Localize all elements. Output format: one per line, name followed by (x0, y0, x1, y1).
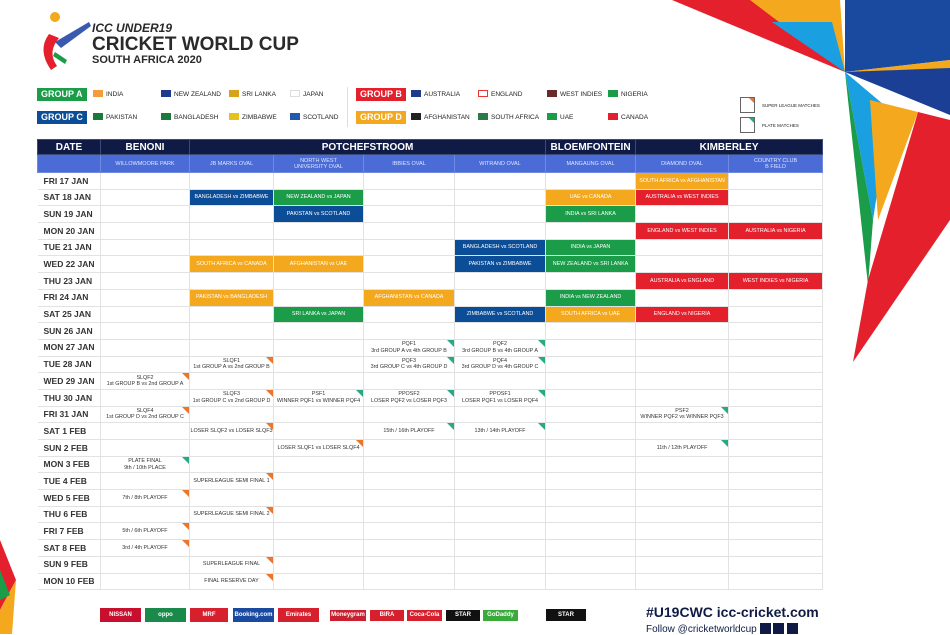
legend: groups: ZIMBABWE (242, 114, 277, 121)
schedule table: SAT 25 JAN (44, 309, 91, 319)
schedule table: UNIVERSITY OVAL (294, 164, 343, 170)
sponsors strip: oppo (158, 612, 173, 618)
schedule table: MON 10 FEB (44, 576, 95, 586)
legend: groups: JAPAN (303, 91, 323, 98)
schedule table: PAKISTAN vs SCOTLAND (287, 211, 350, 217)
schedule table: IBBIES OVAL (392, 160, 426, 166)
schedule table: PPOSF1 (489, 391, 511, 397)
schedule table: WED 22 JAN (44, 259, 95, 269)
schedule table: SLQF1 (223, 358, 240, 364)
sponsors strip: BIRA (380, 612, 394, 618)
schedule table: FRI 24 JAN (44, 292, 88, 302)
legend: groups: SCOTLAND (303, 114, 338, 121)
legend: groups (37, 87, 648, 127)
schedule table (37, 139, 823, 590)
legend: groups: BANGLADESH (174, 114, 218, 121)
footer: hashtag and website (646, 604, 819, 635)
legend: groups: GROUP B (360, 89, 402, 99)
schedule table: SOUTH AFRICA vs UAE (561, 311, 620, 317)
legend: match types (740, 97, 820, 133)
schedule table: PQF1 (402, 341, 416, 347)
schedule table: SOUTH AFRICA vs AFGHANISTAN (639, 178, 725, 184)
schedule table: TUE 4 FEB (44, 476, 87, 486)
schedule table: MANGAUNG OVAL (566, 160, 615, 166)
schedule table: PSF2 (675, 408, 689, 414)
sponsors strip: STAR (455, 612, 471, 618)
schedule table: INDIA vs SRI LANKA (565, 211, 616, 217)
title text: SOUTH AFRICA 2020 (92, 54, 202, 66)
schedule table: 15th / 16th PLAYOFF (383, 428, 435, 434)
schedule table: THU 6 FEB (44, 509, 87, 519)
legend: groups: SRI LANKA (242, 91, 276, 98)
legend: groups: GROUP D (360, 112, 402, 122)
schedule table: ZIMBABWE vs SCOTLAND (467, 311, 533, 317)
schedule table: FRI 7 FEB (44, 526, 84, 536)
schedule table: INDIA vs NEW ZEALAND (560, 294, 621, 300)
schedule table: ENGLAND vs WEST INDIES (647, 228, 717, 234)
schedule table: WED 5 FEB (44, 493, 90, 503)
legend: groups: INDIA (106, 91, 123, 98)
schedule table: SAT 1 FEB (44, 426, 86, 436)
schedule table: LOSER PQF2 vs LOSER PQF3 (371, 398, 447, 404)
schedule table: SUN 26 JAN (44, 326, 93, 336)
title text: CRICKET WORLD CUP (92, 34, 299, 55)
schedule table: TUE 21 JAN (44, 242, 92, 252)
schedule table: DIAMOND OVAL (661, 160, 703, 166)
schedule table: BANGLADESH vs SCOTLAND (463, 244, 537, 250)
schedule table: COUNTRY CLUB (754, 158, 797, 164)
legend: groups: CANADA (621, 114, 648, 121)
sponsors strip: Moneygram (331, 612, 365, 618)
schedule table: AUSTRALIA vs NIGERIA (745, 228, 806, 234)
schedule table: SOUTH AFRICA vs CANADA (196, 261, 267, 267)
schedule table: AFGHANISTAN vs CANADA (375, 294, 443, 300)
decoration: top right colour fan (672, 0, 950, 362)
legend: match types: PLATE MATCHES (762, 123, 799, 128)
schedule table: NEW ZEALAND vs SRI LANKA (553, 261, 628, 267)
schedule table: B FIELD (765, 164, 786, 170)
schedule table: 1st GROUP C vs 2nd GROUP D (193, 398, 270, 404)
sponsors strip (100, 608, 586, 622)
schedule table: AUSTRALIA vs WEST INDIES (646, 194, 719, 200)
schedule table: 5th / 6th PLAYOFF (122, 528, 168, 534)
schedule table: 9th / 10th PLACE (124, 465, 166, 471)
legend: groups: GROUP A (41, 89, 83, 99)
schedule table: SUPERLEAGUE FINAL (203, 561, 260, 567)
title text: ICC UNDER19 (92, 21, 172, 35)
schedule table: UAE vs CANADA (570, 194, 612, 200)
sponsors strip: NISSAN (109, 612, 132, 618)
schedule table: 3rd GROUP C vs 4th GROUP D (371, 364, 447, 370)
legend: groups: NEW ZEALAND (174, 91, 221, 98)
sponsors strip: STAR (558, 612, 574, 618)
schedule table: BANGLADESH vs ZIMBABWE (194, 194, 268, 200)
legend: groups: UAE (560, 114, 573, 121)
schedule table: MON 3 FEB (44, 459, 90, 469)
schedule table: FRI 17 JAN (44, 176, 88, 186)
schedule table: PSF1 (312, 391, 325, 397)
sponsors strip: GoDaddy (487, 612, 514, 618)
schedule table: BENONI (126, 142, 164, 152)
schedule table: WILLOWMOORE PARK (115, 160, 175, 166)
schedule table: PAKISTAN vs BANGLADESH (196, 294, 267, 300)
legend: groups: GROUP C (41, 112, 83, 122)
schedule table: BLOEMFONTEIN (551, 142, 631, 152)
schedule table: SUN 9 FEB (44, 559, 88, 569)
schedule table: PAKISTAN vs ZIMBABWE (469, 261, 532, 267)
schedule table: INDIA vs JAPAN (571, 244, 610, 250)
schedule table: NORTH WEST (300, 158, 337, 164)
schedule table: LOSER SLQF2 vs LOSER SLQF3 (190, 428, 273, 434)
schedule table: MON 27 JAN (44, 342, 95, 352)
logo (44, 12, 299, 70)
schedule table: SUPERLEAGUE SEMI FINAL 2 (193, 511, 270, 517)
title text (92, 21, 299, 66)
schedule table: SUPERLEAGUE SEMI FINAL 1 (193, 478, 270, 484)
schedule table: 3rd GROUP A vs 4th GROUP B (371, 348, 447, 354)
schedule table: MON 20 JAN (44, 226, 95, 236)
schedule table: THU 23 JAN (44, 276, 92, 286)
legend: groups: AFGHANISTAN (424, 114, 470, 121)
schedule table: SAT 8 FEB (44, 543, 86, 553)
schedule table: PQF4 (493, 358, 507, 364)
schedule table: WINNER PQF1 vs WINNER PQF4 (277, 398, 360, 404)
schedule table: WEST INDIES vs NIGERIA (743, 278, 808, 284)
schedule table: SLQF2 (136, 375, 154, 381)
schedule table: ENGLAND vs NIGERIA (654, 311, 710, 317)
schedule table: KIMBERLEY (700, 142, 758, 152)
sponsors strip: MRF (202, 612, 216, 618)
legend: groups: AUSTRALIA (424, 91, 460, 98)
sponsors strip: Booking.com (234, 612, 272, 618)
schedule table: TUE 28 JAN (44, 359, 92, 369)
schedule table: 1st GROUP A vs 2nd GROUP B (193, 364, 270, 370)
schedule table: 3rd GROUP D vs 4th GROUP C (462, 364, 538, 370)
schedule table: FRI 31 JAN (44, 409, 88, 419)
footer: hashtag and website: Follow @cricketworldcup (646, 624, 757, 635)
schedule table: 13th / 14th PLAYOFF (474, 428, 526, 434)
schedule table: AFGHANISTAN vs UAE (290, 261, 347, 267)
schedule table: 11th / 12th PLAYOFF (657, 445, 707, 451)
decoration: bottom left shapes (0, 540, 16, 634)
schedule table: THU 30 JAN (44, 393, 92, 403)
sponsors strip: Emirates (286, 612, 311, 618)
schedule table: 1st GROUP D vs 2nd GROUP C (106, 414, 184, 420)
schedule table: SAT 18 JAN (44, 192, 91, 202)
icon: cricket logo (44, 12, 91, 70)
legend: groups: WEST INDIES (560, 91, 602, 98)
schedule table: WINNER PQF2 vs WINNER PQF3 (640, 414, 724, 420)
schedule table: 7th / 8th PLAYOFF (122, 495, 168, 501)
schedule table: LOSER PQF1 vs LOSER PQF4 (462, 398, 538, 404)
schedule table: PLATE FINAL (128, 458, 162, 464)
schedule table: SLQF3 (223, 391, 240, 397)
schedule table: NEW ZEALAND vs JAPAN (286, 194, 351, 200)
schedule table: PPOSF2 (398, 391, 420, 397)
legend: groups: SOUTH AFRICA (491, 114, 539, 121)
schedule table: SUN 19 JAN (44, 209, 93, 219)
schedule table: FINAL RESERVE DAY (204, 578, 259, 584)
schedule table: SUN 2 FEB (44, 443, 88, 453)
schedule table: JB MARKS OVAL (210, 160, 253, 166)
schedule table: 3rd GROUP B vs 4th GROUP A (462, 348, 538, 354)
schedule table: DATE (56, 142, 82, 152)
schedule table: AUSTRALIA vs ENGLAND (650, 278, 714, 284)
schedule table: WED 29 JAN (44, 376, 95, 386)
legend: groups: ENGLAND (491, 91, 522, 98)
schedule table: 1st GROUP B vs 2nd GROUP A (107, 381, 183, 387)
schedule table: SLQF4 (136, 408, 154, 414)
legend: groups: PAKISTAN (106, 114, 137, 121)
schedule table: PQF3 (402, 358, 416, 364)
schedule table: 3rd / 4th PLAYOFF (122, 545, 168, 551)
sponsors strip: Coca-Cola (410, 612, 439, 618)
legend: groups: NIGERIA (621, 91, 648, 98)
footer: hashtag and website: #U19CWC icc-cricket.com (646, 604, 819, 620)
schedule table: WITRAND OVAL (479, 160, 521, 166)
schedule table: POTCHEFSTROOM (322, 142, 413, 152)
schedule table: SRI LANKA vs JAPAN (292, 311, 345, 317)
legend: match types: SUPER LEAGUE MATCHES (762, 103, 820, 108)
schedule table: PQF2 (493, 341, 507, 347)
schedule table: LOSER SLQF1 vs LOSER SLQF4 (277, 445, 360, 451)
